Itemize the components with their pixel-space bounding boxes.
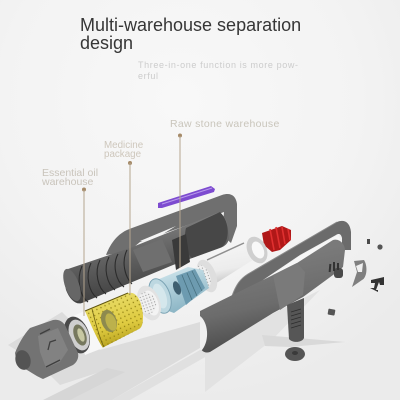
grip with spring (287, 298, 304, 342)
title: Multi-warehouse separation (80, 15, 301, 35)
vents (329, 262, 339, 272)
callout: essential oil warehouse (41, 167, 98, 316)
base disc (285, 347, 305, 361)
red spring (262, 226, 291, 252)
shell barrel (65, 213, 229, 303)
callout: essential oil warehouse: warehouse (41, 176, 94, 188)
white tube (205, 233, 272, 286)
callout: essential oil warehouse: Essential oil (42, 167, 98, 179)
right disc with mesh (193, 257, 221, 295)
purple rod (158, 186, 215, 208)
handle arch (232, 221, 351, 300)
barrel (200, 240, 345, 353)
subtitle: Three-in-one function is more pow- (138, 60, 299, 70)
shell handle (106, 194, 237, 255)
knob cap (13, 320, 78, 379)
shell opening (60, 267, 84, 303)
callout: medicine package (104, 140, 144, 295)
upper shell (60, 194, 237, 303)
white collar (59, 311, 103, 357)
callout: medicine package: Medicine (104, 140, 144, 151)
shell thread rings (79, 250, 132, 302)
blue raw stone chamber (144, 257, 221, 316)
subtitle: erful (138, 71, 159, 81)
floor shadows (8, 290, 345, 400)
callout: raw stone warehouse (170, 118, 280, 268)
yellow medicine package (85, 293, 143, 348)
lower shell (200, 221, 351, 353)
small parts (328, 239, 384, 316)
callout: raw stone warehouse: Raw stone warehouse (170, 118, 280, 130)
white disc and mesh (133, 282, 165, 324)
end stub (334, 268, 343, 278)
title: design (80, 33, 133, 53)
callout: medicine package: package (104, 149, 142, 160)
